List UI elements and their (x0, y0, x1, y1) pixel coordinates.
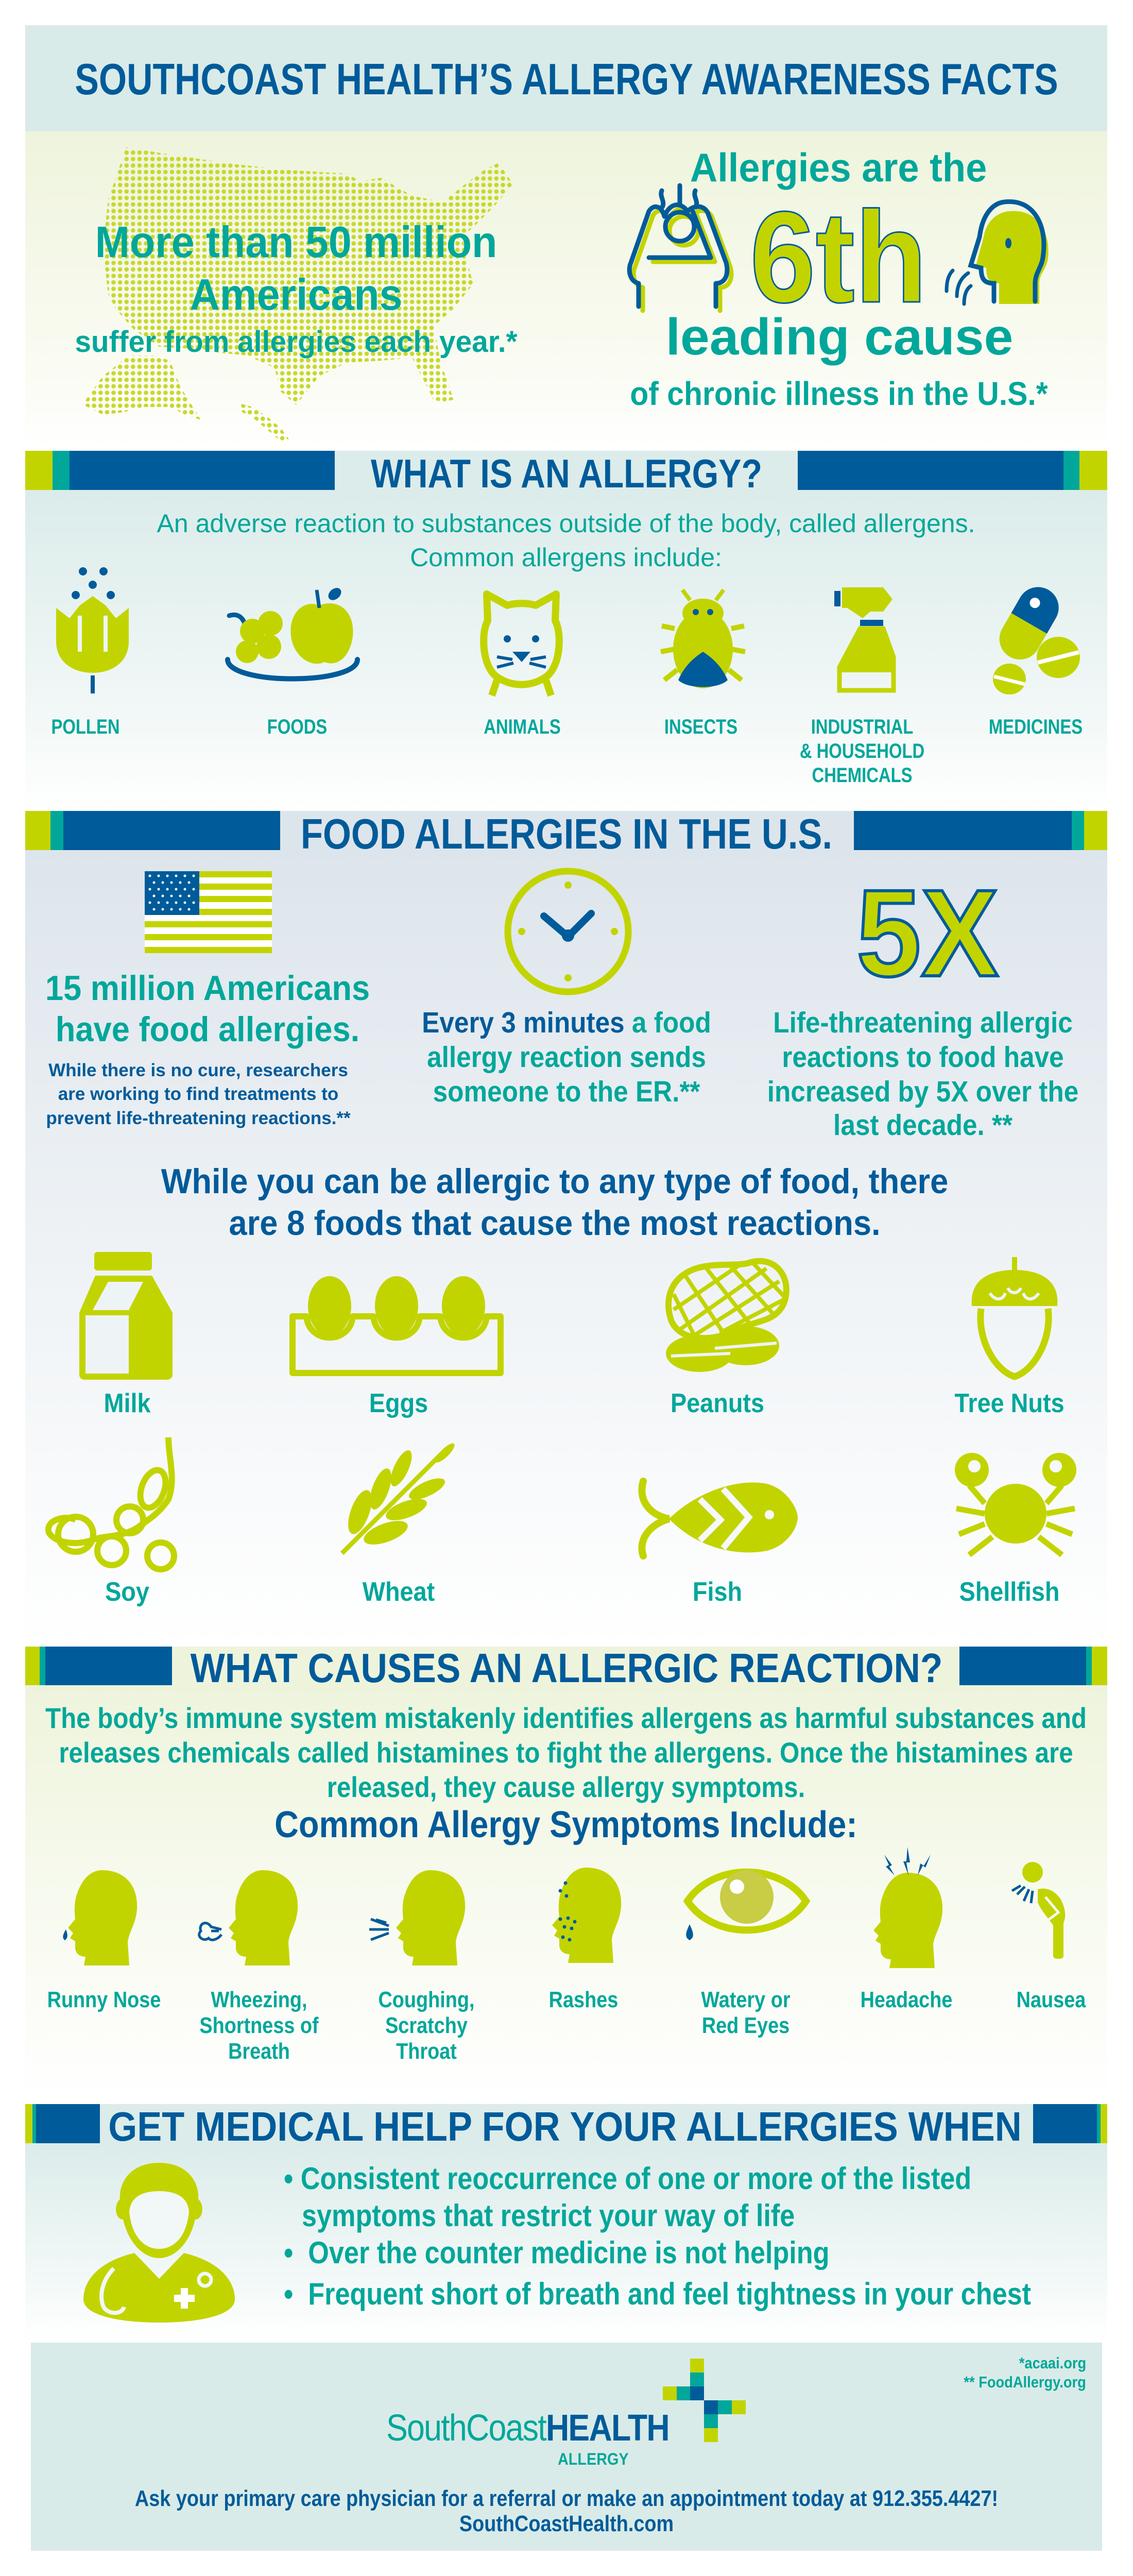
labels: symptoms: Scratchy (385, 2013, 468, 2038)
section bar: causes (25, 1647, 1107, 1685)
stat: 50 million: More than 50 million (95, 218, 497, 267)
labels: allergens: POLLEN (51, 716, 120, 738)
call to action: Ask your primary care physician for a referral or make an appointment today at 912.355.4427! (135, 2486, 998, 2511)
description (157, 509, 975, 572)
icon: rashes (552, 1868, 621, 1963)
stat: 5x increase: Life-threatening allergic (773, 1006, 1073, 1039)
icon: foods (225, 588, 360, 681)
hero panel (25, 131, 1107, 451)
icon: clock (505, 868, 631, 995)
labels: symptoms (47, 1987, 1086, 2064)
icon: watery eyes (683, 1868, 811, 1940)
labels: allergens: FOODS (267, 716, 327, 738)
icon: fish (638, 1478, 798, 1560)
stat: 5x increase (767, 1006, 1078, 1142)
section bar: get medical help (25, 2104, 1107, 2143)
bullet list: symptoms that restrict your way of life (302, 2198, 795, 2233)
description: An adverse reaction to substances outside of the body, called allergens. (157, 509, 975, 538)
explanation text (45, 1702, 1087, 1803)
labels: symptoms: Runny Nose (47, 1987, 161, 2012)
labels: symptoms: Breath (228, 2039, 290, 2064)
icon: soy (45, 1437, 177, 1572)
section bar: food allergies (25, 811, 1107, 850)
stat: every 3 minutes: Every 3 minutes a food (422, 1006, 711, 1039)
labels: 8 foods: Shellfish (959, 1577, 1060, 1607)
icon: stressed person (627, 183, 733, 313)
stat: 15 million: While there is no cure, researchers (48, 1060, 348, 1080)
sources: *acaai.org (1019, 2354, 1086, 2372)
labels: symptoms: Throat (396, 2039, 457, 2064)
labels: symptoms: Red Eyes (702, 2013, 789, 2038)
icon: peanuts (665, 1258, 789, 1372)
labels: 8 foods (104, 1388, 1065, 1607)
labels: 8 foods: Milk (104, 1388, 151, 1418)
stat: 6th leading cause: leading cause (666, 308, 1013, 366)
bullet list: • Consistent reoccurrence of one or more of the listed (284, 2161, 971, 2196)
icon: headache (873, 1847, 942, 1968)
stat: 6th leading cause: of chronic illness in the U.S.* (630, 375, 1048, 412)
big number 6th: 6th (750, 185, 927, 330)
description: Common allergens include: (410, 543, 722, 572)
icon: insects (660, 588, 746, 688)
icon: eggs (289, 1276, 504, 1376)
icon: pollen (56, 567, 129, 693)
labels: allergens: MEDICINES (989, 716, 1083, 738)
explanation text: released, they cause allergy symptoms. (327, 1771, 805, 1803)
stat: 15 million: have food allergies. (56, 1010, 359, 1049)
stat: 15 million (45, 969, 370, 1128)
subheading: symptoms: Common Allergy Symptoms Include: (274, 1804, 857, 1845)
labels: 8 foods: Soy (105, 1577, 149, 1607)
labels: 8 foods: Peanuts (671, 1388, 764, 1418)
heading: GET MEDICAL HELP FOR YOUR ALLERGIES WHEN (108, 2104, 1022, 2149)
labels: allergens: CHEMICALS (812, 764, 912, 787)
logo: ALLERGY (558, 2450, 629, 2468)
bullet list: • Frequent short of breath and feel tightness in your chest (284, 2277, 1031, 2311)
labels: symptoms: Wheezing, (211, 1987, 307, 2012)
heading: WHAT CAUSES AN ALLERGIC REACTION? (191, 1645, 942, 1691)
labels: allergens (51, 716, 1083, 787)
panel: what is an allergy (25, 490, 1107, 810)
explanation text: releases chemicals called histamines to fight the allergens. Once the histamines are (59, 1736, 1073, 1769)
labels: allergens: ANIMALS (484, 716, 561, 738)
icon: milk (79, 1252, 173, 1380)
labels: symptoms: Shortness of (199, 2013, 319, 2038)
labels: allergens: INDUSTRIAL (811, 716, 913, 738)
labels: symptoms: Nausea (1017, 1987, 1086, 2012)
panel: causes (25, 1685, 1107, 2104)
footer panel (31, 2343, 1102, 2551)
labels: symptoms: Rashes (549, 1987, 618, 2012)
labels: 8 foods: Fish (693, 1577, 742, 1607)
icon: 5X: 5X (856, 864, 999, 1002)
labels: symptoms: Coughing, (378, 1987, 475, 2012)
stat: every 3 minutes: allergy reaction sends (427, 1041, 706, 1074)
labels: 8 foods: Eggs (369, 1388, 428, 1418)
stat: 5x increase: increased by 5X over the (767, 1075, 1078, 1108)
labels: symptoms: Watery or (701, 1987, 791, 2012)
footer panel: ** FoodAllergy.org (964, 2373, 1086, 2391)
bullet list: • Over the counter medicine is not helping (284, 2235, 830, 2270)
icon: shellfish crab (955, 1453, 1076, 1557)
labels: 8 foods: Wheat (363, 1577, 435, 1607)
heading: 8 foods: While you can be allergic to any type of food, there (161, 1162, 948, 1201)
icon: coughing (369, 1870, 466, 1965)
panel: get medical help (25, 2143, 1107, 2341)
title band (25, 25, 1107, 131)
US dot map (82, 147, 512, 440)
stat: 15 million: are working to find treatments to (58, 1084, 338, 1104)
stat: every 3 minutes: someone to the ER.** (433, 1075, 700, 1108)
explanation text: The body’s immune system mistakenly identifies allergens as harmful substances and (45, 1702, 1087, 1734)
icon: US flag (145, 871, 272, 953)
labels: allergens: INSECTS (664, 716, 737, 738)
logo: SouthCoastHEALTH (386, 2408, 669, 2449)
icon: wheezing (198, 1870, 298, 1965)
labels: allergens: & HOUSEHOLD (800, 740, 924, 762)
labels: symptoms: Headache (861, 1987, 952, 2012)
logo (386, 2355, 757, 2471)
stat: 5x increase: reactions to food have (782, 1041, 1064, 1074)
stat: 15 million: 15 million Americans (45, 969, 370, 1008)
footer panel: SouthCoastHealth.com (459, 2511, 674, 2536)
stat: 6th leading cause: Allergies are the (690, 145, 987, 190)
stat: 50 million: Americans (190, 270, 402, 319)
icon: doctor (83, 2163, 235, 2323)
icon: coughing head (945, 199, 1049, 306)
section bar: what is an allergy (25, 451, 1107, 490)
icon: runny nose (63, 1870, 137, 1965)
icon: acorn (971, 1257, 1058, 1380)
icon: nausea (1011, 1862, 1065, 1959)
icon: wheat (340, 1444, 455, 1555)
panel: food allergies (25, 850, 1107, 1647)
heading: FOOD ALLERGIES IN THE U.S. (301, 810, 832, 858)
heading: 8 foods (161, 1162, 948, 1243)
icon: animals (480, 590, 563, 697)
bullet list (278, 2161, 1051, 2316)
labels: 8 foods: Tree Nuts (954, 1388, 1065, 1418)
icon: medicines (993, 587, 1080, 694)
stat: every 3 minutes (422, 1006, 711, 1108)
stat: 6th leading cause (627, 145, 1049, 412)
stat: 15 million: prevent life-threatening reactions.** (46, 1108, 351, 1128)
icon: chemicals spray (834, 587, 896, 692)
heading: WHAT IS AN ALLERGY? (371, 451, 762, 496)
title: SOUTHCOAST HEALTH’S ALLERGY AWARENESS FACTS (75, 55, 1058, 104)
stat: 50 million (75, 218, 518, 359)
stat: 5x increase: last decade. ** (833, 1109, 1012, 1142)
heading: 8 foods: are 8 foods that cause the most reactions. (229, 1204, 881, 1243)
stat: 50 million: suffer from allergies each year.* (75, 325, 518, 359)
